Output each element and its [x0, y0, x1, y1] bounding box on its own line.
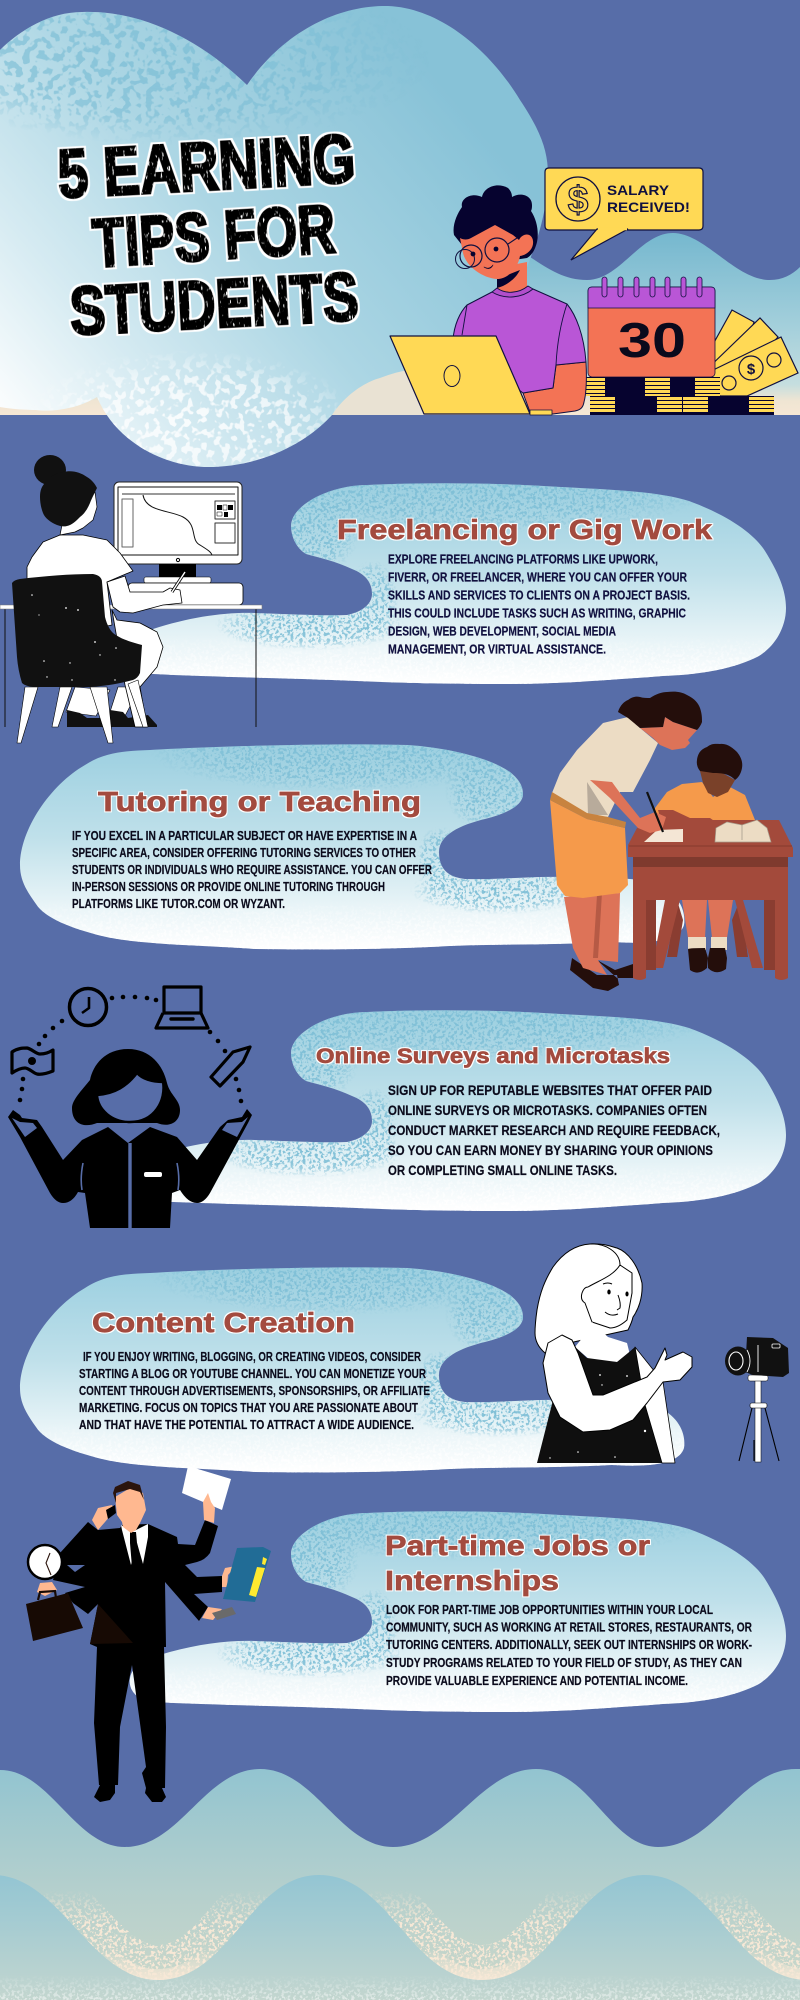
illustration: woman at computer [0, 455, 262, 743]
title: 5 EARNING [56, 120, 357, 213]
text block: ONLINE SURVEYS OR MICROTASKS. COMPANIES OFTEN [388, 1103, 707, 1118]
text block: DESIGN, WEB DEVELOPMENT, SOCIAL MEDIA [388, 624, 616, 638]
callout: salary received: $ [568, 179, 589, 220]
illustration: businessman with many arms [26, 1466, 271, 1802]
text block: MANAGEMENT, OR VIRTUAL ASSISTANCE. [388, 642, 606, 656]
title: STUDENTS [68, 258, 360, 350]
icon: calendar with coins and money: 30 [618, 314, 686, 368]
illustration: content creator [535, 1244, 692, 1463]
text block: PLATFORMS LIKE TUTOR.COM OR WYZANT. [72, 897, 285, 911]
icon: banknote [12, 1048, 53, 1074]
icon: camera on tripod [725, 1337, 789, 1462]
panel: tutoring [20, 744, 684, 950]
illustration: student with laptop [390, 185, 586, 415]
panel: freelancing [152, 483, 786, 684]
text block: SKILLS AND SERVICES TO CLIENTS ON A PROJECT BASIS. [388, 588, 690, 602]
callout: salary received [545, 168, 703, 260]
footer waves [0, 1769, 800, 2000]
icon: clock [70, 988, 106, 1026]
text block: IF YOU EXCEL IN A PARTICULAR SUBJECT OR HAVE EXPERTISE IN A [72, 829, 417, 843]
text block [72, 829, 432, 911]
text block: THIS COULD INCLUDE TASKS SUCH AS WRITING, GRAPHIC [388, 606, 686, 620]
heading: Content Creation [92, 1307, 355, 1338]
title [56, 120, 360, 350]
text block: MARKETING. FOCUS ON TOPICS THAT YOU ARE PASSIONATE ABOUT [79, 1401, 418, 1415]
hero cloud [0, 0, 560, 490]
title: TIPS FOR [90, 190, 337, 282]
text block: OR COMPLETING SMALL ONLINE TASKS. [388, 1163, 617, 1178]
text block: CONTENT THROUGH ADVERTISEMENTS, SPONSORSHIPS, OR AFFILIATE [79, 1384, 430, 1398]
panel: part-time jobs [130, 1511, 786, 1712]
heading: Tutoring or Teaching [98, 786, 421, 817]
text block: SIGN UP FOR REPUTABLE WEBSITES THAT OFFER PAID [388, 1083, 712, 1098]
text block: FIVERR, OR FREELANCER, WHERE YOU CAN OFFER YOUR [388, 570, 687, 584]
text block: IN-PERSON SESSIONS OR PROVIDE ONLINE TUTORING THROUGH [72, 880, 385, 894]
figure [8, 1049, 252, 1228]
text block: PROVIDE VALUABLE EXPERIENCE AND POTENTIAL INCOME. [386, 1674, 688, 1688]
hero sand patch [332, 365, 560, 415]
hero backdrop wave [0, 233, 800, 415]
text block [388, 552, 690, 656]
text block: SO YOU CAN EARN MONEY BY SHARING YOUR OPINIONS [388, 1143, 713, 1158]
heading: Internships [385, 1565, 559, 1596]
panel: online surveys [172, 1010, 786, 1211]
text block: IF YOU ENJOY WRITING, BLOGGING, OR CREATING VIDEOS, CONSIDER [83, 1350, 421, 1364]
text block [388, 1083, 720, 1178]
text block: CONDUCT MARKET RESEARCH AND REQUIRE FEEDBACK, [388, 1123, 720, 1138]
illustration: teacher and student [550, 692, 793, 991]
text block [79, 1350, 430, 1432]
icon: pencil [211, 1047, 250, 1086]
heading [385, 1530, 650, 1596]
illustration: woman juggling tasks [8, 987, 252, 1228]
heading: Freelancing or Gig Work [337, 514, 712, 545]
text block: STUDENTS OR INDIVIDUALS WHO REQUIRE ASSISTANCE. YOU CAN OFFER [72, 863, 432, 877]
text block: SPECIFIC AREA, CONSIDER OFFERING TUTORING SERVICES TO OTHER [72, 846, 416, 860]
text block: AND THAT HAVE THE POTENTIAL TO ATTRACT A WIDE AUDIENCE. [79, 1418, 414, 1432]
icon: laptop [156, 987, 208, 1028]
text block: STARTING A BLOG OR YOUTUBE CHANNEL. YOU CAN MONETIZE YOUR [79, 1367, 426, 1381]
text block: LOOK FOR PART-TIME JOB OPPORTUNITIES WITHIN YOUR LOCAL [386, 1603, 713, 1617]
icon: calendar with coins and money: $ [747, 361, 756, 378]
callout: salary received: SALARY [607, 182, 670, 198]
panel: content creation [20, 1267, 684, 1472]
icon: calendar with coins and money [586, 277, 798, 415]
callout: salary received: RECEIVED! [607, 199, 690, 215]
text block: EXPLORE FREELANCING PLATFORMS LIKE UPWORK, [388, 552, 658, 566]
text block [386, 1603, 752, 1688]
heading: Online Surveys and Microtasks [316, 1045, 670, 1068]
heading: Part-time Jobs or [385, 1530, 650, 1561]
